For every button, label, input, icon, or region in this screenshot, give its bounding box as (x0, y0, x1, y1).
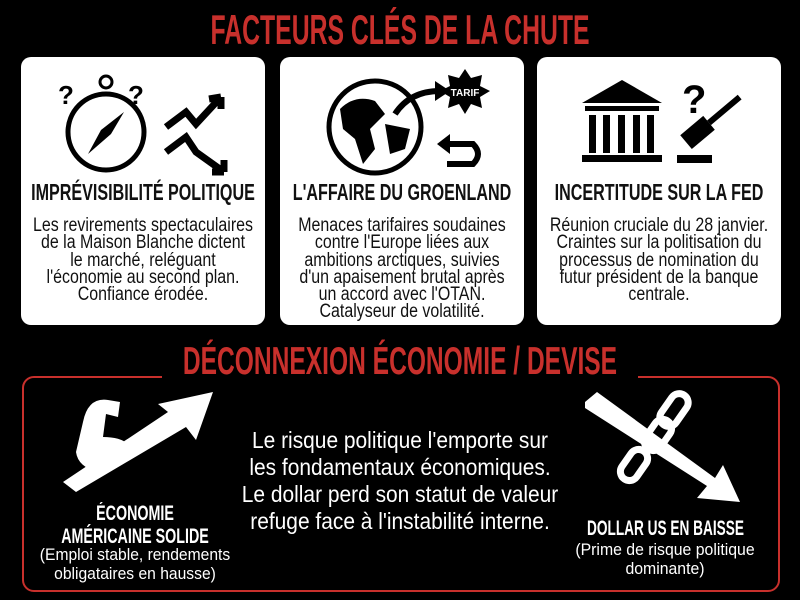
left subtext: (Emploi stable, rendements (40, 545, 230, 564)
heading: INCERTITUDE SUR LA FED (555, 179, 763, 205)
panel: economy/currency disconnect (22, 376, 780, 592)
text: Confiance érodée. (78, 284, 208, 305)
text: ambitions arctiques, suivies (304, 250, 500, 271)
icon: bank and gavel: ? (682, 78, 706, 122)
icon: compass and zigzag arrows: ? (58, 80, 74, 110)
icon: compass and zigzag arrows (58, 74, 228, 176)
text: un accord avec l'OTAN. (319, 284, 485, 305)
text: Catalyseur de volatilité. (319, 301, 485, 322)
text: de la Maison Blanche dictent (41, 232, 245, 253)
right subtext: dominante) (625, 559, 705, 578)
text: Réunion cruciale du 28 janvier. (550, 215, 768, 236)
text: Les revirements spectaculaires (33, 215, 253, 236)
text: le marché, reléguant (70, 250, 216, 271)
panel: political unpredictability (21, 57, 265, 325)
icon: globe with tariff: TARIF (451, 88, 479, 99)
heading: IMPRÉVISIBILITÉ POLITIQUE (31, 179, 255, 205)
left label: ÉCONOMIE (96, 502, 174, 525)
icon: broken chain with falling arrow (585, 390, 740, 502)
center text (242, 427, 558, 534)
text (298, 215, 506, 322)
icon: arm with rising arrow (63, 392, 213, 492)
center text: les fondamentaux économiques. (249, 454, 551, 480)
title: FACTEURS CLÉS DE LA CHUTE (210, 6, 590, 53)
center text: Le risque politique l'emporte sur (252, 427, 548, 453)
text: l'économie au second plan. (47, 267, 239, 288)
icon: bank and gavel (582, 78, 742, 163)
right subtext: (Prime de risque politique (575, 540, 755, 559)
text: contre l'Europe liées aux (315, 232, 489, 253)
heading: disconnect: DÉCONNEXION ÉCONOMIE / DEVISE (183, 340, 617, 383)
panel: Fed uncertainty (537, 57, 781, 325)
right label: DOLLAR US EN BAISSE (587, 517, 744, 540)
center text: Le dollar perd son statut de valeur (242, 481, 558, 507)
left subtext (40, 545, 230, 583)
left label: AMÉRICAINE SOLIDE (61, 525, 209, 548)
text: Menaces tarifaires soudaines (298, 215, 506, 236)
text (33, 215, 253, 305)
left label (61, 502, 209, 548)
text (550, 215, 768, 305)
text: processus de nomination du (559, 250, 759, 271)
right subtext (575, 540, 755, 578)
panel: Greenland affair (280, 57, 524, 325)
center text: refuge face à l'instabilité interne. (250, 508, 550, 534)
left subtext: obligataires en hausse) (54, 564, 216, 583)
text: Craintes sur la politisation du (557, 232, 761, 253)
text: centrale. (628, 284, 690, 305)
icon: globe with tariff (326, 69, 490, 176)
heading: L'AFFAIRE DU GROENLAND (293, 179, 511, 205)
icon: compass and zigzag arrows: ? (128, 80, 144, 110)
text: d'un apaisement brutal après (299, 267, 505, 288)
text: futur président de la banque (560, 267, 758, 288)
